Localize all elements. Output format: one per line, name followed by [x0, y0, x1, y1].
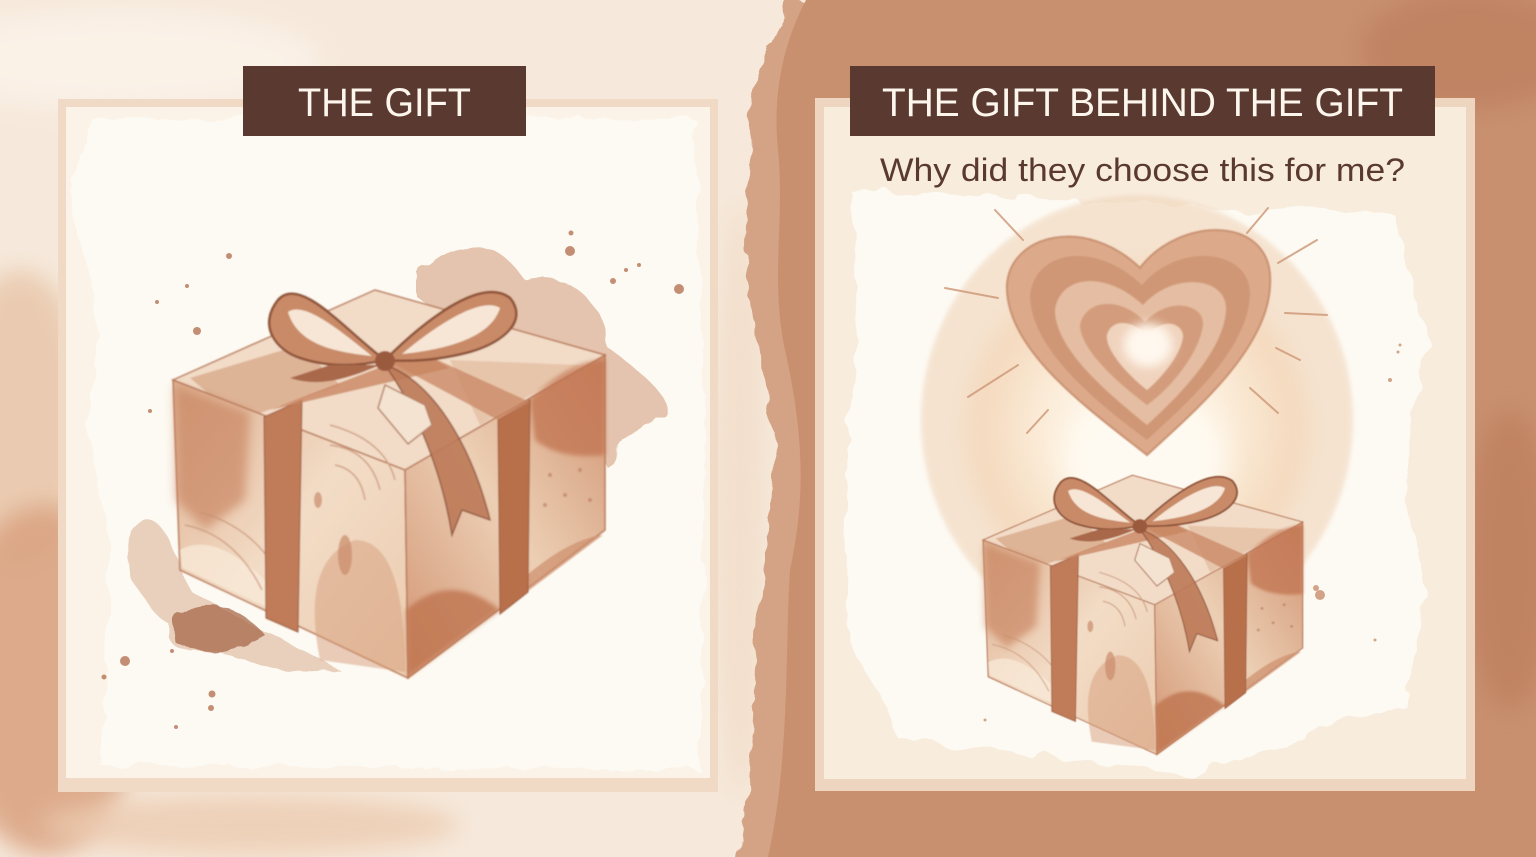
illustration: small gift box — [983, 475, 1303, 755]
heading: the gift: THE GIFT — [298, 81, 471, 125]
heading: the gift behind the gift — [850, 66, 1435, 136]
watercolor stain behind left gift — [128, 247, 667, 673]
paint splatter: right — [984, 344, 1402, 722]
subheading question: Why did they choose this for me? — [880, 152, 1405, 188]
heading: the gift behind the gift: THE GIFT BEHIND THE GIFT — [882, 81, 1403, 125]
background: left cream panel — [0, 0, 790, 857]
heading: the gift — [243, 66, 526, 136]
panel: the gift behind the gift paper — [815, 98, 1475, 791]
icon: layered watercolor heart — [1007, 230, 1270, 455]
rays around heart — [945, 208, 1327, 433]
glow behind heart — [921, 195, 1353, 645]
panel: the gift paper — [58, 99, 718, 792]
background: right terracotta panel — [735, 0, 1536, 857]
illustration: large gift box — [173, 290, 605, 678]
paint splatter: left — [102, 230, 684, 729]
